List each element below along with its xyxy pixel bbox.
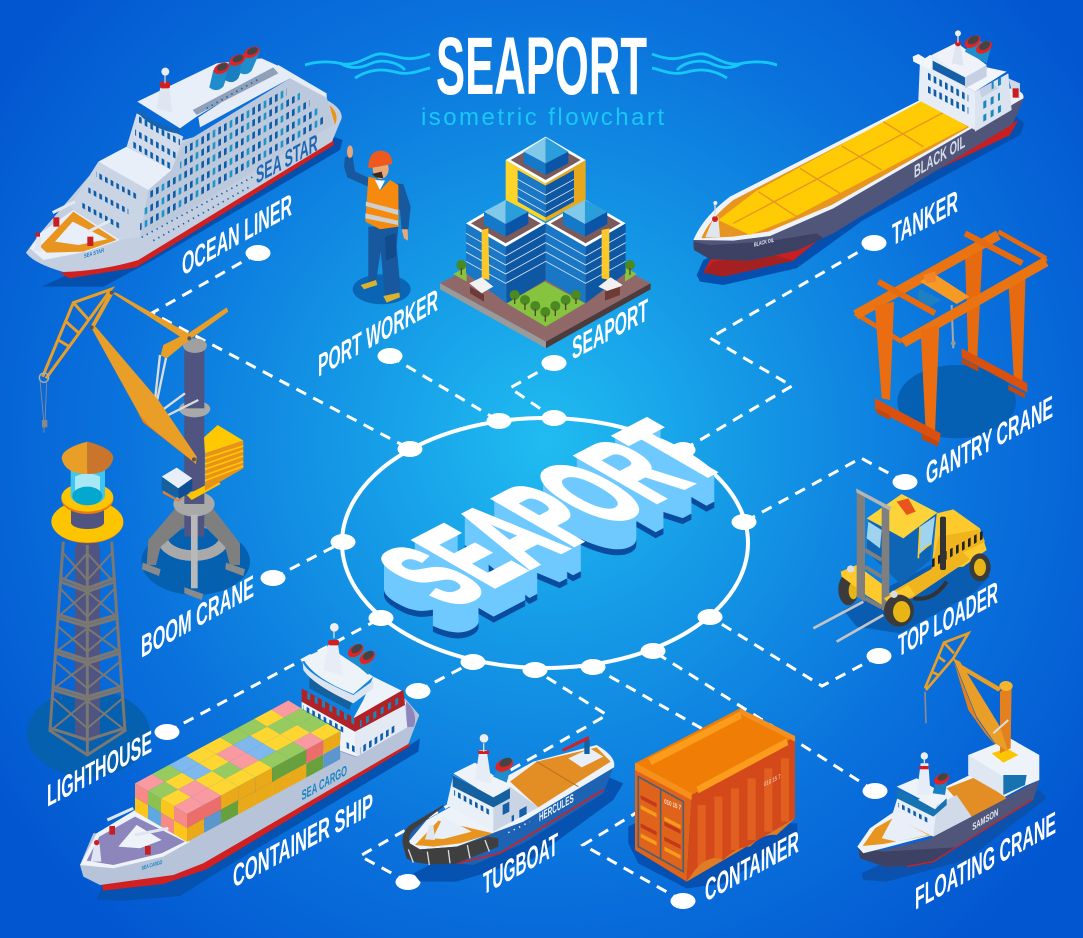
lighthouse — [27, 442, 150, 777]
boom crane — [39, 289, 250, 600]
gantry crane — [855, 232, 1047, 447]
port worker label: PORT WORKER — [318, 283, 438, 384]
seaport buildings — [440, 137, 651, 348]
container ship label: CONTAINER SHIP — [233, 787, 373, 895]
stacked containers: side face — [187, 731, 340, 842]
central 3D SEAPORT lettering: SEAPORT — [349, 405, 753, 623]
bridge — [302, 702, 357, 757]
subtitle: isometric flowchart — [421, 104, 664, 131]
container ship: SEA CARGO — [142, 860, 163, 872]
label nodes — [154, 235, 918, 909]
tanker: BLACK OIL — [914, 131, 965, 183]
waves right — [652, 54, 777, 78]
text: TUGBOAT — [483, 827, 558, 902]
container — [628, 708, 797, 888]
tanker: BLACK OIL — [754, 238, 774, 249]
ocean liner: SEA STAR — [84, 248, 105, 260]
tugboat — [402, 734, 623, 882]
ocean liner label: OCEAN LINER — [182, 187, 292, 283]
container label: CONTAINER — [705, 824, 799, 909]
seaport small label: SEAPORT — [572, 293, 648, 367]
central ring with nodes — [330, 410, 756, 678]
floating crane — [857, 633, 1047, 882]
boom crane label: BOOM CRANE — [141, 569, 254, 665]
waves left — [305, 54, 430, 78]
tanker — [693, 30, 1024, 285]
tanker label: TANKER — [892, 184, 958, 253]
floating crane: SAMSON — [972, 807, 998, 833]
container ship: SEA CARGO — [302, 762, 347, 804]
title: SEAPORT — [436, 21, 647, 112]
stacked containers: end face — [135, 783, 187, 842]
ocean liner — [26, 44, 343, 287]
container: 010 15 7 — [764, 774, 781, 789]
port worker — [344, 145, 411, 304]
ocean liner: SEA STAR — [256, 129, 318, 190]
container: 010 15 7 — [664, 799, 681, 812]
container ship — [80, 623, 420, 901]
stacked containers: top face — [135, 701, 340, 814]
connector lines — [152, 243, 905, 901]
lighthouse label: LIGHTHOUSE — [47, 724, 152, 814]
tugboat: HERCULES — [539, 790, 574, 824]
top loader — [813, 488, 991, 642]
